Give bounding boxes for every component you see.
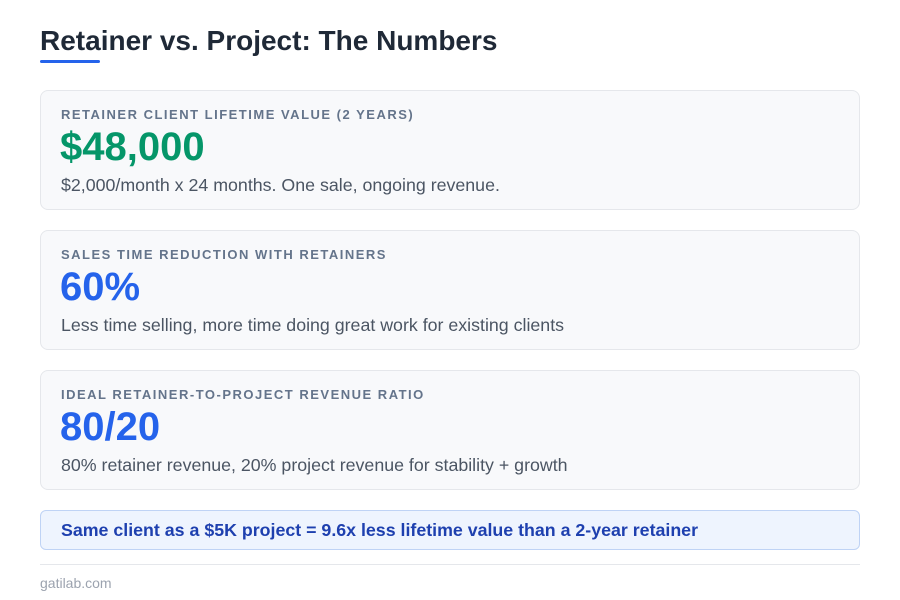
callout xyxy=(40,510,860,550)
label: IDEAL RETAINER-TO-PROJECT REVENUE RATIO xyxy=(61,387,425,402)
description: Less time selling, more time doing great work for existing clients xyxy=(61,315,564,335)
panel: lifetime value xyxy=(40,90,860,210)
callout: Same client as a $5K project = 9.6x less lifetime value than a 2-year retainer xyxy=(61,520,698,540)
label: RETAINER CLIENT LIFETIME VALUE (2 YEARS) xyxy=(61,107,414,122)
panel: ratio xyxy=(40,370,860,490)
number: $48,000 xyxy=(60,125,205,169)
description: $2,000/month x 24 months. One sale, ongoing revenue. xyxy=(61,175,500,195)
panel: sales time xyxy=(40,230,860,350)
number: 60% xyxy=(60,265,140,309)
title: Retainer vs. Project: The Numbers xyxy=(40,25,497,56)
number: 80/20 xyxy=(60,405,160,449)
description: 80% retainer revenue, 20% project revenue for stability + growth xyxy=(61,455,568,475)
footer: gatilab.com xyxy=(40,575,112,591)
label: SALES TIME REDUCTION WITH RETAINERS xyxy=(61,247,387,262)
